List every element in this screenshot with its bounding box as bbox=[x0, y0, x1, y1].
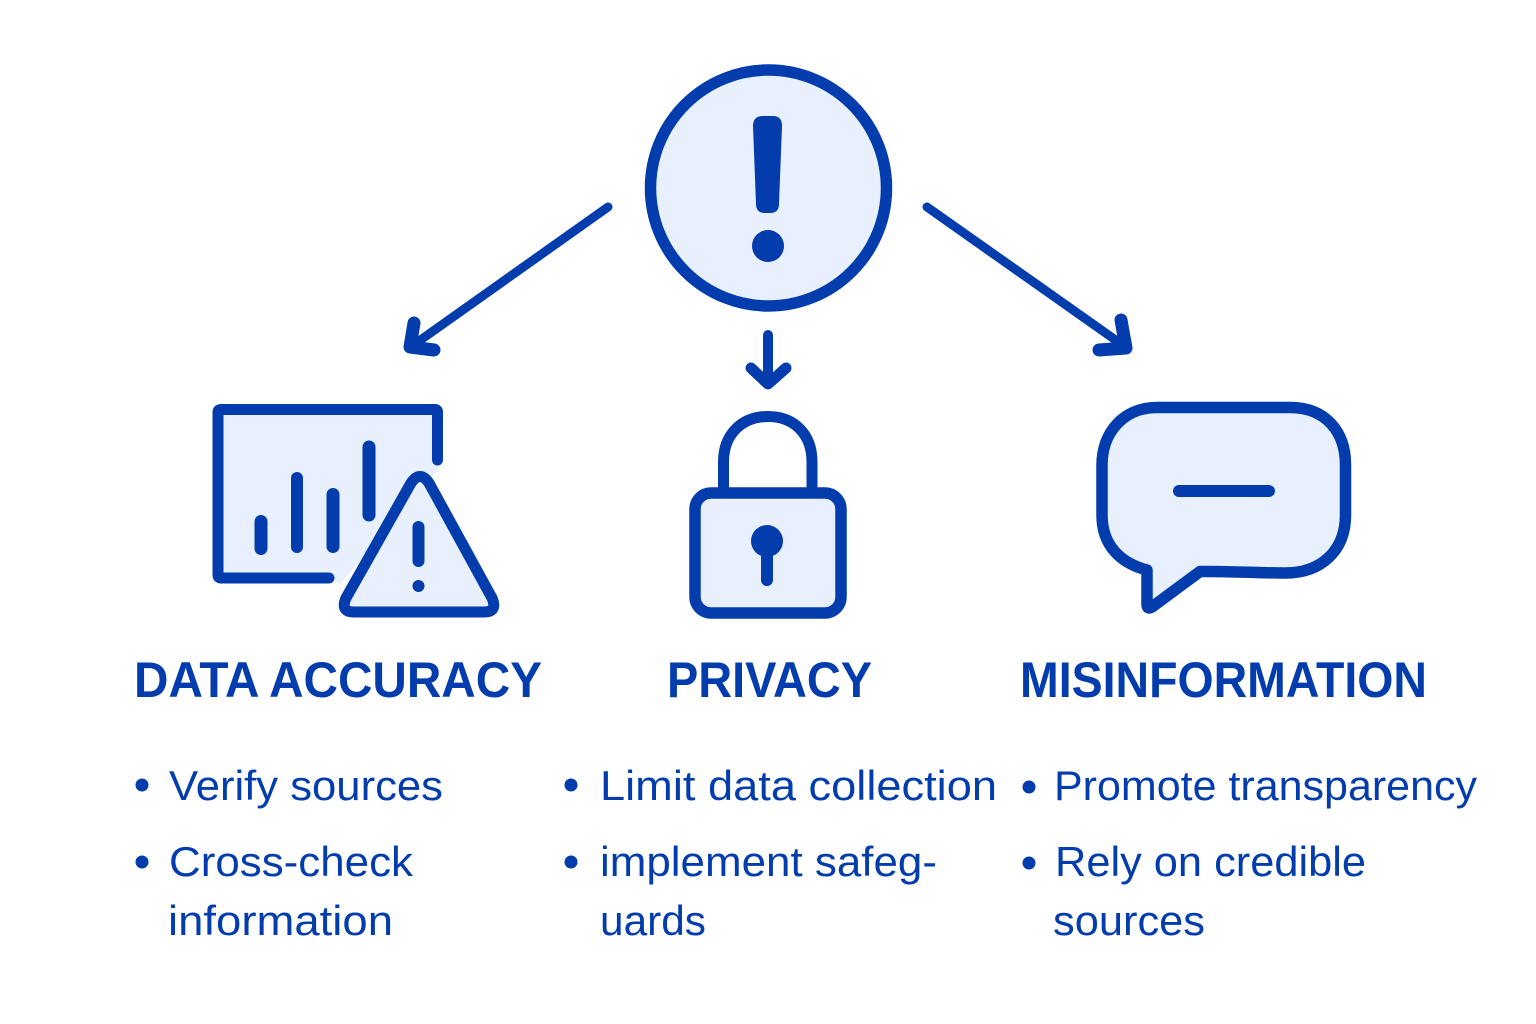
icon: chart with warning triangle bbox=[218, 409, 494, 612]
heading: data accuracy: DATA ACCURACY bbox=[134, 652, 542, 708]
arrow: to data accuracy bbox=[410, 207, 608, 350]
arrow: to privacy bbox=[751, 335, 786, 384]
list: misinformation bbox=[1022, 762, 1477, 944]
list: misinformation: Rely on credible bbox=[1055, 838, 1366, 885]
list: data accuracy: information bbox=[168, 897, 393, 944]
icon: speech bubble bbox=[1102, 408, 1346, 608]
icon: padlock bbox=[695, 416, 841, 613]
list: misinformation: sources bbox=[1053, 897, 1205, 944]
heading: misinformation: MISINFORMATION bbox=[1020, 652, 1427, 708]
list: privacy bbox=[564, 762, 997, 944]
arrow: to misinformation bbox=[927, 207, 1126, 350]
list: misinformation: Promote transparency bbox=[1054, 762, 1477, 809]
list: data accuracy: Cross-check bbox=[169, 838, 414, 885]
icon: central exclamation circle bbox=[650, 70, 886, 306]
heading: privacy: PRIVACY bbox=[667, 652, 872, 708]
list: privacy: implement safeg- bbox=[600, 838, 937, 885]
list: data accuracy: Verify sources bbox=[169, 762, 443, 809]
list: data accuracy bbox=[136, 762, 443, 944]
list: privacy: uards bbox=[600, 897, 706, 944]
list: privacy: Limit data collection bbox=[600, 762, 997, 809]
